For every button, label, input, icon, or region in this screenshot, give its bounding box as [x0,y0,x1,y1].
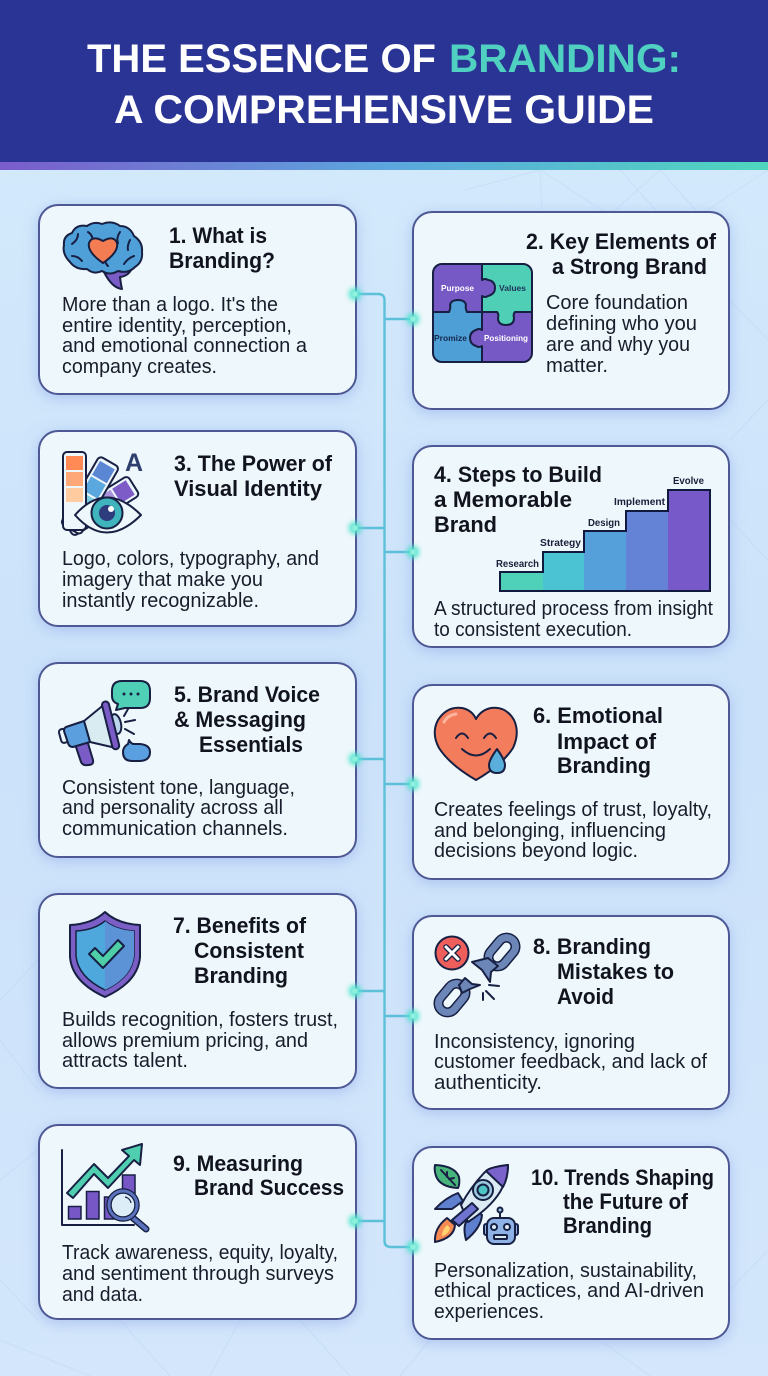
icon: palette and eye [60,449,143,536]
heading: 2. Key Elements of [526,229,717,254]
body text [62,777,295,840]
heading: 6. Emotional [533,703,663,728]
body text: decisions beyond logic. [434,840,638,862]
heading: 8. Branding [533,934,651,959]
panel: 1 What is Branding [39,205,356,394]
staircase chart: Research [496,559,539,570]
heading [531,1165,714,1238]
icon: puzzle: Promize [434,333,467,343]
icon: growth chart and magnifier [62,1144,146,1229]
staircase chart: Design [588,518,620,529]
body text: imagery that make you [62,569,263,591]
heading: & Messaging [174,707,306,732]
body text: More than a logo. It's the [62,294,278,316]
title: THE ESSENCE OF [87,37,436,81]
heading: Visual Identity [174,476,323,501]
icon: rocket, leaf and robot [435,1165,518,1244]
body text: and personality across all [62,797,283,819]
heading: a Memorable [434,487,572,512]
body text [434,799,712,862]
icon: puzzle: Values [499,283,526,293]
staircase chart: Evolve [673,476,704,487]
title: A COMPREHENSIVE GUIDE [114,88,654,132]
body text: defining who you [546,313,697,335]
body text: Personalization, sustainability, [434,1260,697,1282]
body text: to consistent execution. [434,619,632,641]
icon: broken chain and error mark [435,934,519,1016]
body text: are and why you [546,334,690,356]
heading: Branding? [169,248,275,273]
heading [533,703,663,778]
panel: 3 Visual Identity [39,431,356,626]
icon: megaphone [58,681,150,765]
body text [434,1031,707,1094]
body text: and emotional connection a [62,335,308,357]
heading [169,223,275,273]
heading [174,451,333,501]
body text: and belonging, influencing [434,820,666,842]
icon: shield with check [70,912,140,997]
icon: smiling heart [435,708,517,780]
heading: Essentials [199,732,303,757]
icon: brain with heart [64,222,142,289]
heading [533,934,674,1009]
body text: matter. [546,355,608,377]
body text: and data. [62,1284,143,1306]
body text: Logo, colors, typography, and [62,548,319,570]
panel: 8 Mistakes [413,916,729,1109]
body text: Track awareness, equity, loyalty, [62,1242,338,1264]
title [87,37,681,132]
heading: Brand Success [194,1175,344,1200]
body text: attracts talent. [62,1050,188,1072]
body text: Core foundation [546,292,688,314]
body text [62,1242,338,1306]
body text: experiences. [434,1301,544,1323]
body text: and sentiment through surveys [62,1263,334,1285]
heading: Brand [434,512,497,537]
body text: Inconsistency, ignoring [434,1031,635,1053]
panel: 5 Brand Voice [39,663,356,857]
heading [526,229,717,279]
body text: company creates. [62,356,217,378]
body text: A structured process from insight [434,598,713,620]
icon: puzzle: Purpose [441,283,474,293]
panel: 2 Key Elements [413,212,729,409]
body text [546,292,697,377]
heading: 4. Steps to Build [434,462,602,487]
heading: Branding [194,963,288,988]
body text: communication channels. [62,818,288,840]
heading [174,682,320,757]
body text: ethical practices, and AI-driven [434,1280,704,1302]
body text: instantly recognizable. [62,590,259,612]
staircase chart: Strategy [540,538,581,549]
icon: puzzle: Positioning [484,333,528,343]
heading: 7. Benefits of [173,913,307,938]
heading: 10. Trends Shaping [531,1165,714,1190]
body text [434,1260,704,1323]
heading [173,913,307,988]
panel: 6 Emotional Impact [413,685,729,879]
panel: 10 Trends [413,1147,729,1339]
title: BRANDING: [449,37,681,81]
body text: Consistent tone, language, [62,777,295,799]
heading: Branding [557,753,651,778]
body text: Creates feelings of trust, loyalty, [434,799,712,821]
panel: 4 Steps [413,446,729,647]
heading: a Strong Brand [552,254,707,279]
heading: Branding [563,1213,652,1238]
heading: 5. Brand Voice [174,682,320,707]
staircase chart: Implement [614,497,666,508]
body text: entire identity, perception, [62,315,292,337]
heading [173,1151,344,1200]
body text [62,294,308,378]
body text: Builds recognition, fosters trust, [62,1009,338,1031]
heading: the Future of [563,1189,689,1214]
heading: 1. What is [169,223,267,248]
heading: Impact of [557,729,657,754]
staircase chart [496,476,710,591]
icon: palette and eye: A [125,449,143,477]
body text: authenticity. [434,1072,542,1094]
heading: 3. The Power of [174,451,333,476]
body text: allows premium pricing, and [62,1030,308,1052]
body text [62,1009,338,1072]
body text [434,598,713,641]
heading: Avoid [557,984,614,1009]
icon: puzzle [433,264,532,362]
connector nodes [348,288,420,1254]
panel: 9 Measuring [39,1125,356,1319]
heading: Mistakes to [557,959,674,984]
heading [434,462,602,537]
body text: customer feedback, and lack of [434,1051,707,1073]
heading: 9. Measuring [173,1151,303,1176]
panel: 7 Benefits [39,894,356,1088]
connector lines [355,294,413,1247]
header band [0,0,768,170]
heading: Consistent [194,938,305,963]
body text [62,548,319,612]
